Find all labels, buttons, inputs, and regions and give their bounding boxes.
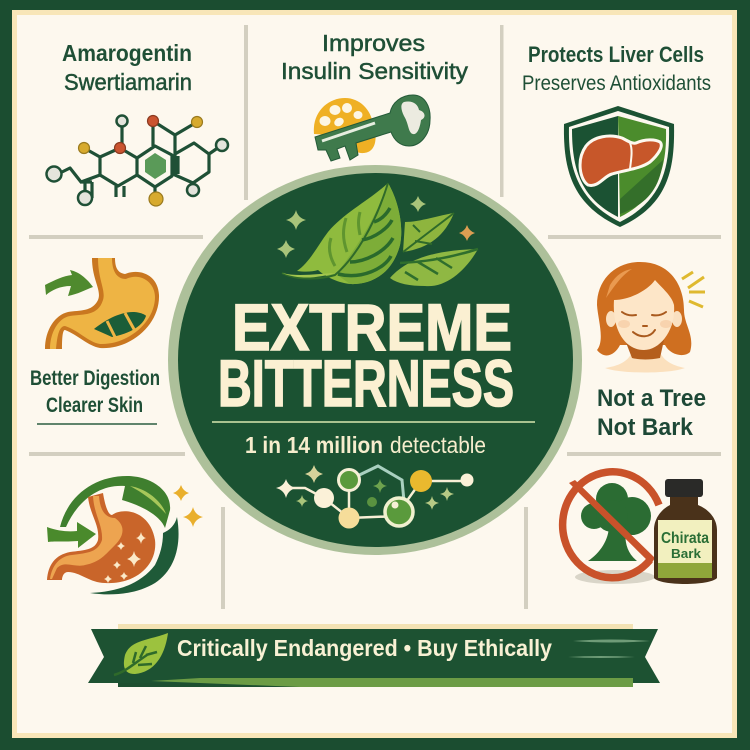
title: EXTREME <box>232 290 512 364</box>
panel: compounds <box>46 40 228 206</box>
title <box>218 290 514 420</box>
heading: insulin sensitivity: Improves <box>322 30 425 56</box>
icon: leaves <box>282 183 478 286</box>
subtitle: detectable <box>390 432 486 458</box>
heading: compound names: Amarogentin <box>62 40 192 66</box>
text: not a tree: Not a Tree <box>597 385 706 412</box>
heading: liver protection <box>522 42 711 95</box>
icon: molecule <box>46 116 228 206</box>
text: not a tree <box>597 385 706 441</box>
text: better digestion: Better Digestion <box>30 367 160 390</box>
title: BITTERNESS <box>218 346 514 420</box>
icon: banner leaf <box>114 633 168 675</box>
panel: not a tree warning <box>563 472 717 584</box>
banner <box>88 624 660 687</box>
icon: chirata bark bottle: Bark <box>671 546 702 561</box>
icon: sparkles <box>104 485 203 583</box>
icon: stomach with arrow <box>45 258 159 349</box>
heading: compound names <box>62 40 192 95</box>
icon: stomach <box>47 493 155 583</box>
panel: digestion <box>30 258 160 424</box>
heading: insulin sensitivity: Insulin Sensitivity <box>281 58 469 84</box>
central badge <box>168 165 582 555</box>
icon: shield with liver <box>564 106 674 227</box>
icon: crossed-out tree <box>563 472 659 584</box>
icon: chirata bark bottle <box>654 479 717 584</box>
subtitle: 1 in 14 million <box>245 432 383 458</box>
icon: leaf swoosh <box>60 476 179 594</box>
icon: chirata bark bottle: Chirata <box>661 530 709 547</box>
text: better digestion: Clearer Skin <box>46 394 143 417</box>
icon: green arrow <box>47 522 96 548</box>
heading: liver protection: Preserves Antioxidants <box>522 72 711 95</box>
panel: gut with leaf swoosh <box>47 476 203 594</box>
heading: insulin sensitivity <box>281 30 469 84</box>
banner text: Critically Endangered • Buy Ethically <box>177 635 552 661</box>
heading: compound names: Swertiamarin <box>64 69 192 95</box>
text: not a tree: Not Bark <box>597 414 694 441</box>
subtitle <box>245 432 486 458</box>
icon: bottom molecule network <box>276 465 474 528</box>
icon: key <box>314 95 430 161</box>
heading: liver protection: Protects Liver Cells <box>528 42 704 67</box>
panel: skin <box>597 262 706 441</box>
panel: insulin sensitivity <box>281 30 469 161</box>
icon: sparkles <box>277 196 475 258</box>
text: better digestion <box>30 367 160 417</box>
icon: woman's face <box>597 262 691 372</box>
icon: glow rays <box>682 272 705 307</box>
panel: liver protection <box>522 42 711 227</box>
